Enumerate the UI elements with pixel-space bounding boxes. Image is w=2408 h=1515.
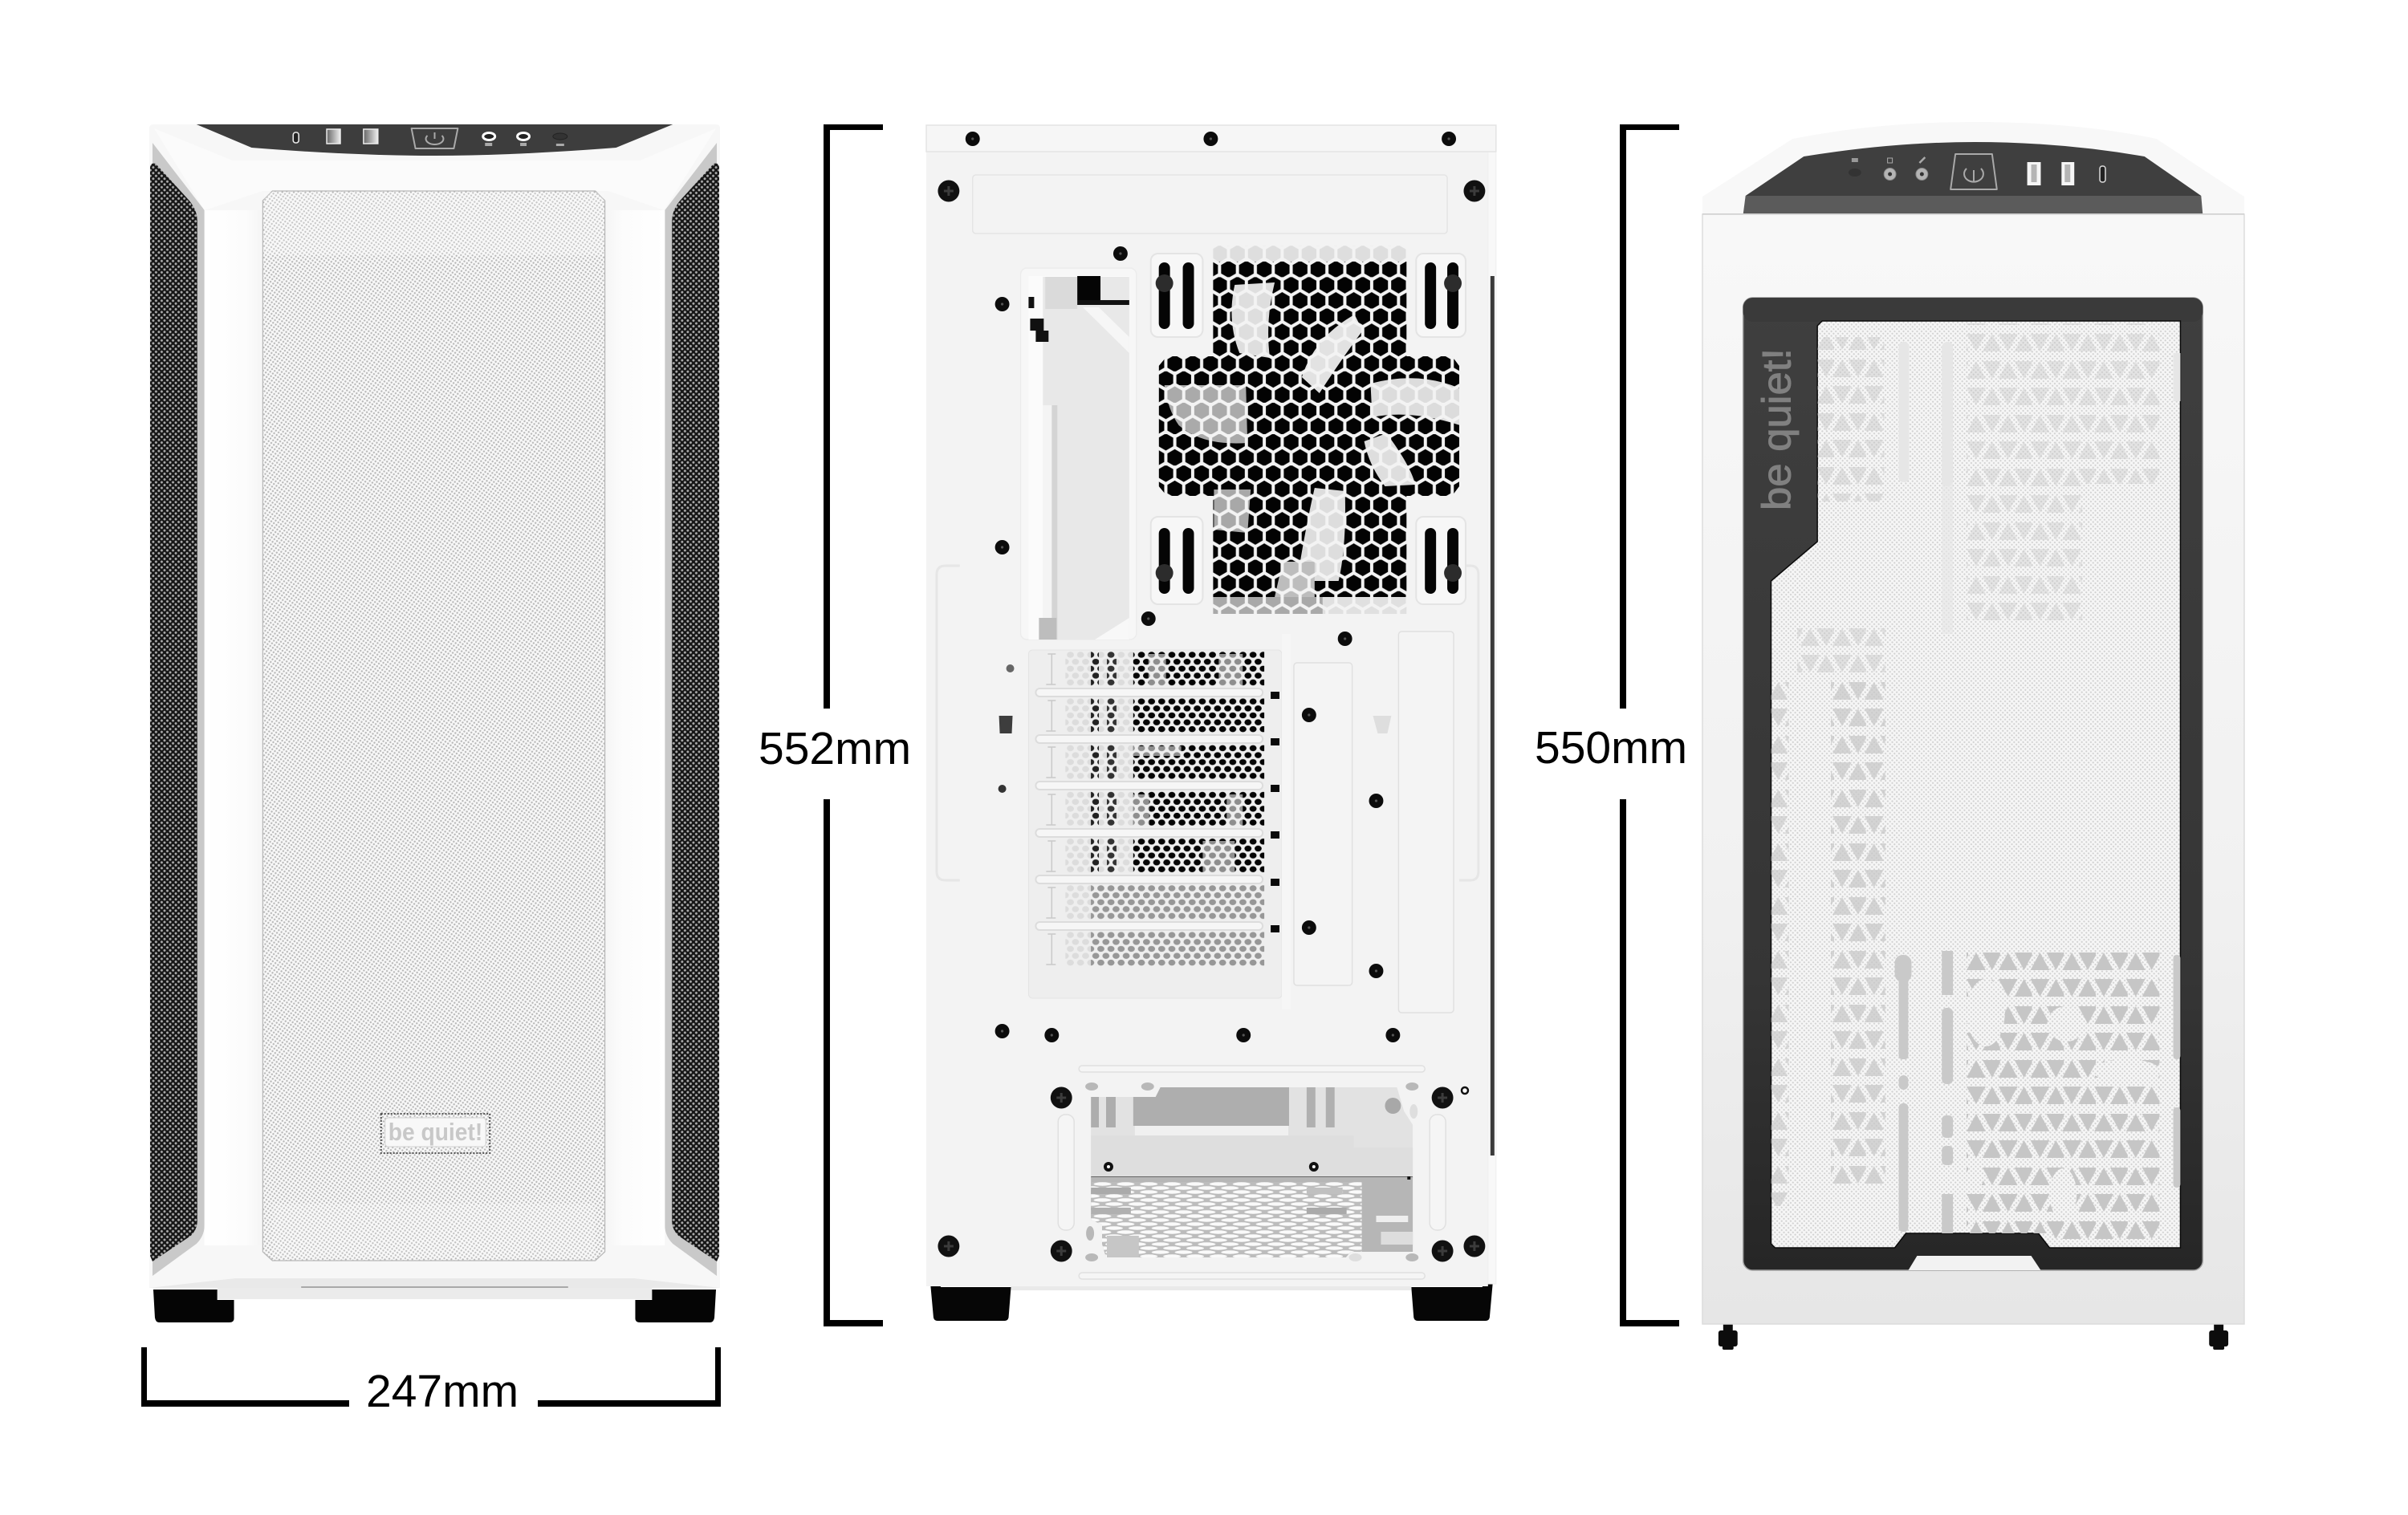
- bottom row tint: [1213, 597, 1323, 614]
- seam line: [1702, 213, 2244, 215]
- vertical mesh bars upper: [1899, 342, 2180, 634]
- side mesh panel: [1771, 321, 2180, 1248]
- expansion slots panel: [1028, 650, 1282, 998]
- front logo badge: [381, 1114, 490, 1153]
- side view of case: [1702, 122, 2244, 1350]
- frame inner band: [1743, 298, 2203, 322]
- front case foot right: [635, 1290, 716, 1322]
- triangle perforations: [1771, 323, 2160, 1248]
- middle right triangles: [1967, 484, 2082, 620]
- perforated floor: [1091, 1182, 1362, 1257]
- usb port side one: [2028, 162, 2040, 185]
- fan blade lower left: [1214, 489, 1251, 533]
- fan hex grille: [1155, 241, 1466, 618]
- top rear strip: [926, 125, 1496, 152]
- vertical mesh bars lower: [1895, 951, 2180, 1233]
- slot retention squares: [1271, 692, 1279, 932]
- usb-c port: [293, 132, 299, 143]
- side bracket lower: [1620, 799, 1679, 1326]
- back height dimension bracket: [759, 124, 911, 1326]
- holes slots six and seven grey: [1091, 885, 1265, 966]
- front column right: [605, 210, 665, 1245]
- right panel cutout two: [1398, 632, 1454, 1013]
- interior mesh: [1133, 1087, 1289, 1126]
- rear case feet: [930, 1281, 1493, 1321]
- front view of case: [149, 124, 720, 1322]
- led button side: [1849, 158, 1861, 177]
- audio jack headphone: [518, 133, 530, 146]
- side bracket upper: [1620, 124, 1679, 709]
- right panel cutout one: [1294, 663, 1352, 985]
- fan blade lower right: [1365, 433, 1415, 486]
- lower left triangles: [1831, 676, 1885, 1186]
- audio jack mic: [483, 133, 495, 146]
- fan blade upper centre: [1302, 315, 1363, 393]
- side height label: 550mm: [1535, 722, 1687, 774]
- fan blade left: [1165, 385, 1247, 444]
- front column left: [205, 210, 262, 1245]
- slot clips: [1046, 654, 1056, 965]
- fan blade lower centre: [1297, 488, 1345, 581]
- side mesh right with trim: [665, 143, 719, 1276]
- back bracket upper: [824, 124, 883, 709]
- side mesh left with trim: [150, 143, 205, 1276]
- width dimension bracket: [141, 1347, 721, 1417]
- fan blade bottom edge: [1275, 562, 1315, 597]
- interior tray: [1135, 1126, 1288, 1135]
- power button side: [1950, 154, 1997, 189]
- rear case body: [926, 152, 1488, 1286]
- front case foot left: [153, 1290, 234, 1322]
- top cover rectangle: [973, 175, 1447, 234]
- lower right triangles: [1967, 952, 2160, 1233]
- side body: [1702, 214, 2244, 1324]
- front plinth: [218, 1288, 652, 1299]
- usb port two: [364, 129, 378, 144]
- top shoulder bevels: [154, 128, 716, 210]
- usb port one: [327, 129, 340, 144]
- interior floor line: [1091, 1176, 1413, 1178]
- bottom lip: [149, 1278, 720, 1288]
- rear plinth: [1011, 1286, 1411, 1290]
- small screws: [966, 132, 1456, 1042]
- small ringed holes: [1104, 1087, 1468, 1172]
- width bracket line right: [538, 1347, 721, 1407]
- slot cover plate: [1282, 634, 1291, 1009]
- trapezoid cutouts: [999, 716, 1391, 733]
- fan blade upper left: [1231, 282, 1275, 358]
- vertical logo: be quiet!: [1754, 348, 1799, 510]
- usb-c side: [2100, 166, 2105, 182]
- bottom slit: [301, 1286, 568, 1288]
- fan shapes masking triangles: [1966, 979, 2161, 1220]
- top row tint: [1213, 246, 1406, 262]
- slot brackets and separators: [1035, 688, 1263, 930]
- right side strip: [1488, 152, 1496, 1284]
- psu opening: [1091, 1087, 1413, 1257]
- upper right triangles: [1967, 323, 2160, 484]
- grey patches within holes: [1133, 654, 1243, 873]
- usb port side two: [2061, 162, 2074, 185]
- side height dimension bracket: [1535, 124, 1687, 1326]
- lower left edge triangles: [1771, 676, 1788, 1206]
- mesh bottom highlight band: [272, 1204, 596, 1258]
- expansion slot holes: [1066, 652, 1265, 966]
- front ports: [293, 128, 567, 148]
- width label: 247mm: [366, 1366, 519, 1417]
- rear view of case: [926, 125, 1496, 1321]
- frame bottom handle: [1908, 1256, 2040, 1270]
- mesh top highlight band: [264, 193, 604, 255]
- mid left triangles faint: [1797, 626, 1885, 674]
- led button: [553, 133, 567, 146]
- front mesh panel: [262, 191, 605, 1261]
- front case body: [149, 124, 720, 1288]
- audio jack two: [1916, 157, 1928, 180]
- expansion window: [1020, 268, 1137, 640]
- side feet: [1719, 1324, 2228, 1350]
- back bracket lower: [824, 799, 883, 1326]
- side panel dark edge: [1491, 276, 1495, 1156]
- front frame dark: [1743, 298, 2203, 1270]
- front logo badge: be quiet!: [388, 1118, 482, 1146]
- fan blade right: [1371, 378, 1460, 425]
- holes slots one to five dark: [1133, 652, 1265, 884]
- power button: [412, 128, 458, 148]
- side top cap: [1702, 122, 2244, 214]
- psu corner holes: [1085, 1082, 1418, 1261]
- audio jack one: [1884, 158, 1896, 180]
- fan slot group: [1151, 254, 1466, 604]
- side handle left: [937, 566, 960, 880]
- side top dark panel: [1743, 142, 2203, 214]
- psu bracket bars: [1058, 1066, 1446, 1279]
- large screws: [938, 180, 1485, 1261]
- upper left triangles: [1817, 337, 1885, 502]
- width bracket line left: [141, 1347, 349, 1407]
- top control panel dark: [197, 124, 673, 156]
- side ports: [1849, 154, 2105, 189]
- back height label: 552mm: [759, 723, 911, 774]
- side handle right: [1459, 566, 1479, 880]
